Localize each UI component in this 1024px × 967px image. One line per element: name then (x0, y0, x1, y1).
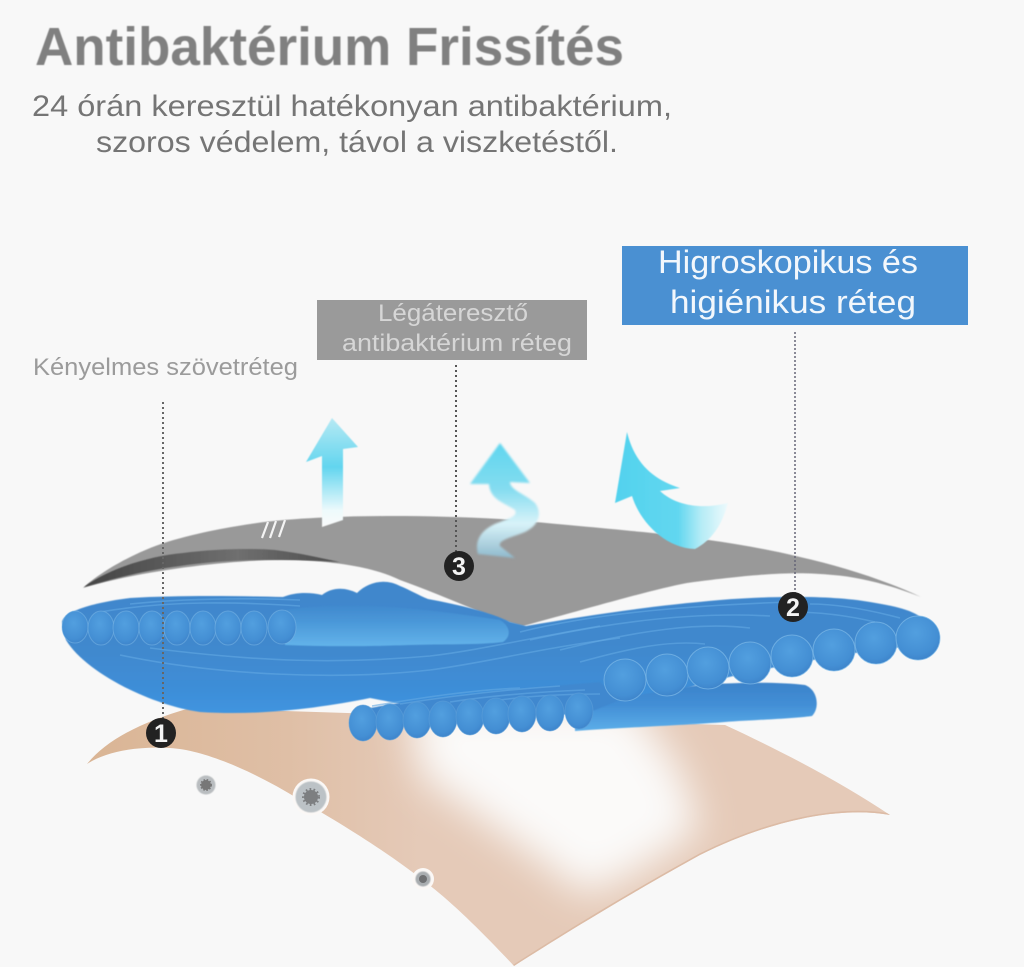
lower tube (575, 683, 817, 731)
dotted leader line 2 (794, 332, 796, 594)
lower left fibre ends (349, 693, 593, 741)
dotted leader line 1 (162, 402, 164, 720)
label: hygroscopic hygienic layer: Higroskopikus és (658, 244, 918, 280)
subtitle (32, 90, 672, 159)
label: breathable antibacterial layer: antibaktérium réteg (342, 330, 572, 357)
upper tube (285, 605, 509, 646)
hygroscopic layer: blue fibres (62, 582, 940, 741)
label: hygroscopic hygienic layer (622, 244, 968, 325)
subtitle: 24 órán keresztül hatékonyan antibaktérium, (32, 90, 672, 123)
label: hygroscopic hygienic layer: higiénikus réteg (670, 284, 916, 320)
label: breathable antibacterial layer: Légáteresztő (378, 300, 528, 327)
right fibre ends (604, 616, 940, 701)
lower strand stripes (352, 682, 620, 728)
main fibre body (62, 582, 930, 715)
arrow: wavy up (470, 443, 539, 558)
subtitle: szoros védelem, távol a viszketéstől. (96, 126, 618, 159)
label: breathable antibacterial layer (317, 300, 587, 360)
title: Antibaktérium Frissítés (35, 17, 624, 77)
arrow: straight up (306, 418, 358, 527)
fabric layer: tan (80, 700, 900, 967)
arrow: curved up (615, 432, 728, 549)
badge 3 (444, 551, 474, 581)
germ icons (196, 776, 434, 890)
badge 1 (146, 718, 176, 748)
upper left fibre ends (62, 610, 296, 645)
fibre strands (100, 599, 900, 675)
badge 3: 3 (452, 553, 466, 581)
badge 2 (778, 592, 808, 622)
breathable layer: gray (83, 516, 921, 626)
badge 2: 2 (786, 594, 800, 622)
dotted leader line 3 (455, 365, 457, 552)
label: comfortable fabric layer: Kényelmes szövetréteg (33, 354, 298, 381)
badge 1: 1 (154, 720, 168, 748)
